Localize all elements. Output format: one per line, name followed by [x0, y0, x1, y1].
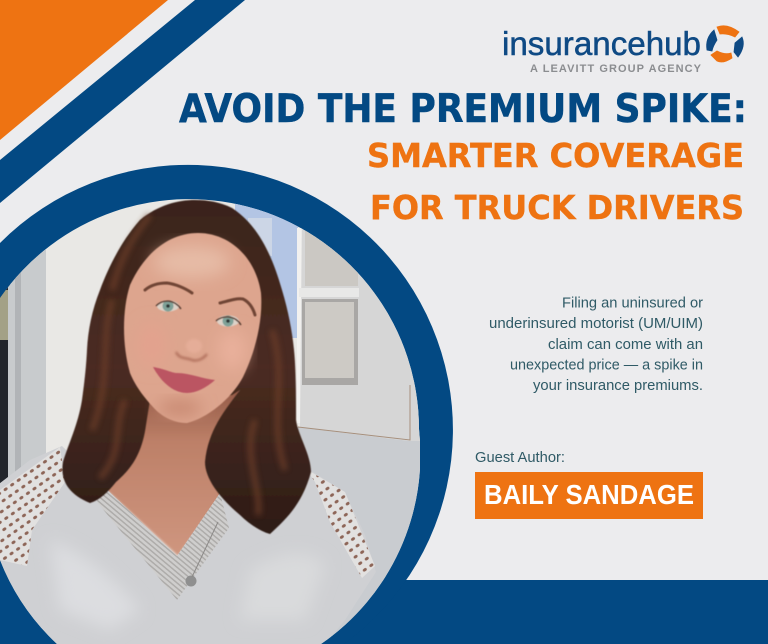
left mesh shoulder: [0, 447, 65, 566]
neck and chest: [108, 390, 240, 556]
sweater highlights: [56, 550, 130, 624]
eyes: [156, 300, 241, 326]
title line 2: SMARTER COVERAGE: [367, 136, 744, 175]
intro text: Filing an uninsured or: [562, 296, 703, 312]
necklace: [186, 576, 196, 586]
intro text: [489, 296, 703, 394]
left door frame: [0, 250, 46, 490]
intro text: unexpected price — a spike in: [510, 358, 703, 374]
logo tagline: A LEAVITT GROUP AGENCY: [530, 63, 702, 75]
title line 3: FOR TRUCK DRIVERS: [370, 188, 744, 227]
author name badge: BAILY SANDAGE: [484, 479, 694, 510]
blue ring behind photo: [0, 165, 453, 644]
grey door and panels: [296, 205, 420, 640]
eyebrows: [145, 283, 255, 315]
lips: [153, 367, 215, 393]
intro text: claim can come with an: [548, 337, 703, 353]
intro text: your insurance premiums.: [533, 378, 703, 394]
right mesh shoulder: [306, 469, 375, 578]
portrait photo illustration: [0, 198, 420, 644]
photo background: siding wall: [0, 198, 420, 644]
blue diagonal stripe: [0, 0, 245, 203]
nose: [176, 339, 207, 361]
hair highlights: [92, 215, 285, 515]
guest author label: Guest Author:: [475, 450, 565, 466]
logo: [502, 25, 743, 75]
window calendar: [235, 203, 303, 423]
ribbed V-neck collar: [97, 483, 229, 600]
orange corner triangle: [0, 0, 168, 140]
bottom blue band: [300, 580, 768, 644]
sweater body: [0, 446, 376, 644]
intro text: underinsured motorist (UM/UIM): [489, 316, 703, 332]
face: [124, 233, 261, 423]
face shading: [138, 246, 246, 416]
logo wordmark: insurancehub: [502, 25, 701, 62]
hair: [62, 200, 311, 534]
author name badge: [475, 472, 703, 519]
logo icon: lifebuoy: [707, 26, 743, 62]
